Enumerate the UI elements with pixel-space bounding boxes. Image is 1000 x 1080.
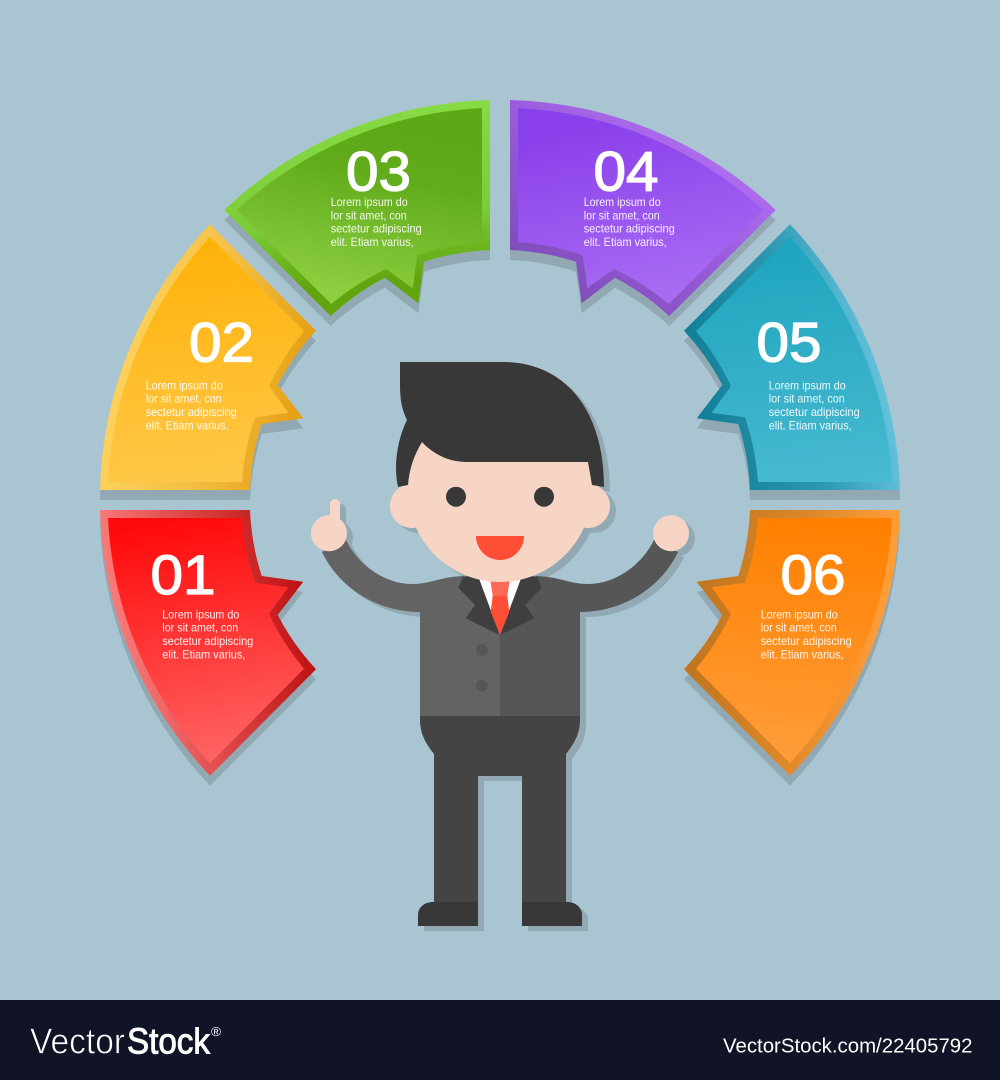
- jacket left with raised arm: [322, 540, 500, 716]
- panel: step 01 red: [100, 510, 316, 786]
- jacket buttons: [476, 644, 488, 692]
- footer logo: ®: [211, 1024, 221, 1039]
- text block 01: elit. Etiam varius,: [162, 647, 245, 661]
- shirt: [477, 575, 523, 635]
- text block 02: Lorem ipsum do: [146, 378, 223, 392]
- right shoe: [522, 902, 582, 926]
- panel: step 02 yellow: [100, 224, 316, 500]
- text block 05: lor sit amet, con: [769, 392, 845, 406]
- number 02: 02: [189, 311, 254, 374]
- text block 06: Lorem ipsum do: [761, 607, 838, 621]
- right hand: [653, 515, 689, 551]
- eyes: [446, 487, 554, 507]
- footer logo: Stock: [127, 1020, 211, 1062]
- text block 01: [162, 607, 253, 661]
- text block 06: elit. Etiam varius,: [761, 647, 844, 661]
- mouth: [476, 536, 524, 560]
- hair: [396, 362, 604, 487]
- text block 06: sectetur adipiscing: [761, 634, 852, 648]
- text block 05: [769, 378, 860, 432]
- left shoe: [418, 902, 478, 926]
- number 03: 03: [346, 140, 411, 202]
- text block 03: sectetur adipiscing: [331, 222, 422, 236]
- panel: step 04 purple: [510, 100, 776, 326]
- text block 03: Lorem ipsum do: [331, 195, 408, 209]
- text block 02: sectetur adipiscing: [146, 405, 237, 419]
- text block 04: elit. Etiam varius,: [584, 235, 667, 249]
- jacket right with raised arm: [500, 540, 678, 716]
- text block 05: sectetur adipiscing: [769, 405, 860, 419]
- panel: step 06 orange: [684, 510, 900, 786]
- character shadow: [317, 367, 695, 931]
- text block 02: lor sit amet, con: [146, 392, 222, 406]
- necktie: [490, 578, 510, 635]
- lapels: [458, 575, 542, 635]
- trousers: [420, 716, 580, 902]
- text block 04: Lorem ipsum do: [584, 195, 661, 209]
- text block 04: lor sit amet, con: [584, 208, 660, 222]
- text block 01: Lorem ipsum do: [162, 607, 240, 621]
- text block 03: [331, 195, 422, 249]
- ears: [390, 484, 610, 528]
- text block 06: [761, 607, 852, 661]
- footer logo: Vector: [30, 1020, 125, 1062]
- text block 05: Lorem ipsum do: [769, 378, 846, 392]
- text block 04: [584, 195, 675, 249]
- text block 02: [146, 378, 237, 432]
- text block 01: sectetur adipiscing: [162, 634, 253, 648]
- footer id: VectorStock.com/22405792: [723, 1036, 972, 1058]
- text block 04: sectetur adipiscing: [584, 222, 675, 236]
- text block 03: elit. Etiam varius,: [331, 235, 414, 249]
- text block 03: lor sit amet, con: [331, 208, 407, 222]
- number 04: 04: [594, 140, 658, 202]
- left hand with thumb: [311, 499, 347, 551]
- number 06: 06: [780, 543, 846, 606]
- text block 02: elit. Etiam varius,: [146, 418, 229, 432]
- panel: step 03 green: [224, 100, 490, 326]
- text block 06: lor sit amet, con: [761, 621, 837, 635]
- businessman character: [311, 362, 695, 931]
- footer bar: [0, 1000, 1000, 1080]
- face: [408, 398, 592, 582]
- text block 01: lor sit amet, con: [162, 621, 238, 635]
- number 01: 01: [150, 543, 216, 606]
- text block 05: elit. Etiam varius,: [769, 418, 852, 432]
- footer logo: [30, 1020, 221, 1062]
- panel: step 05 teal: [684, 224, 900, 500]
- number 05: 05: [756, 311, 822, 374]
